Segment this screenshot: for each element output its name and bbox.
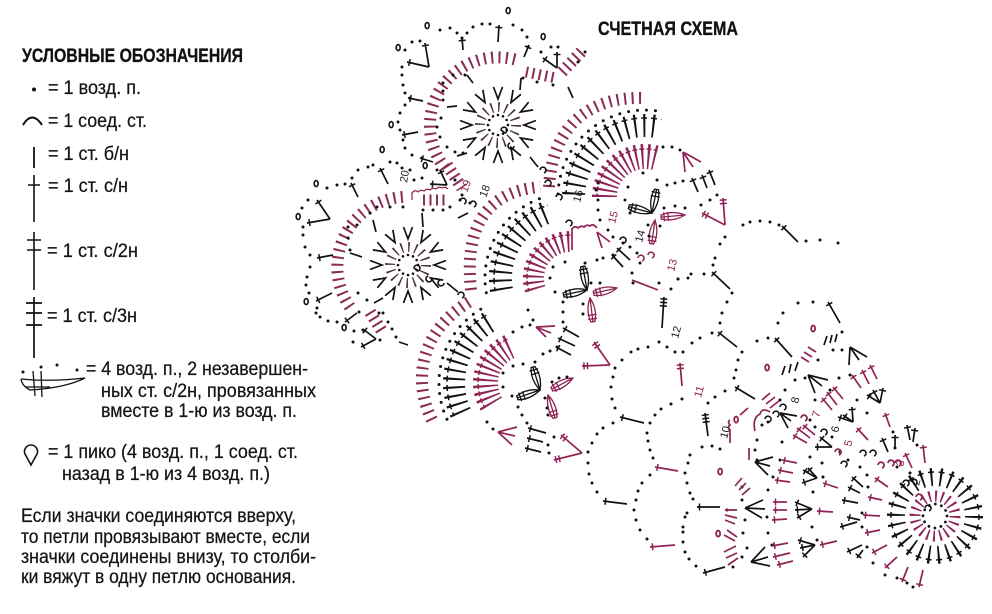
row numbers: 14 (633, 229, 648, 244)
row numbers (398, 169, 923, 487)
row numbers: 11 (692, 385, 707, 399)
row numbers: 3 (894, 459, 907, 468)
legend: double treble crochet: = 1 ст. с/3н (47, 306, 137, 327)
legend heading: УСЛОВНЫЕ ОБОЗНАЧЕНИЯ (22, 45, 243, 67)
lower fan (422, 300, 582, 460)
row numbers: 10 (718, 425, 733, 440)
scallop chains (588, 221, 917, 587)
legend: picot: = 1 пико (4 возд. п., 1 соед. ст. (48, 442, 298, 463)
row numbers: 12 (669, 325, 684, 340)
legend: single crochet: = 1 ст. б/н (48, 144, 129, 165)
legend: double crochet (28, 175, 128, 222)
top flower motif (389, 8, 585, 188)
row numbers: 5 (842, 439, 855, 448)
corner medallion and outer rows (716, 326, 979, 587)
row numbers: 15 (606, 210, 621, 225)
row numbers: 8 (789, 396, 802, 405)
upper fan (549, 98, 725, 290)
legend: picot (25, 442, 298, 485)
legend: explanatory note: ки вяжут в одну петлю основания. (21, 567, 296, 588)
row numbers: 13 (665, 258, 680, 273)
row numbers: 19 (459, 178, 474, 194)
diagram heading: СЧЕТНАЯ СХЕМА (598, 18, 738, 40)
row numbers: 6 (829, 425, 842, 434)
row numbers: 20 (398, 169, 412, 184)
legend: slip stitch: = 1 соед. ст. (48, 111, 147, 132)
row numbers: 18 (478, 183, 493, 199)
chart: crochet diagram (296, 8, 979, 587)
legend: cluster symbol (21, 359, 316, 422)
row numbers: 7 (810, 410, 823, 419)
legend: double treble crochet (26, 297, 137, 358)
row numbers: 16 (571, 189, 586, 204)
legend: cluster symbol: ных ст. с/2н, провязанных (101, 381, 316, 402)
row numbers: 2 (910, 478, 923, 487)
legend: cluster symbol: вместе в 1-ю из возд. п. (101, 401, 297, 422)
legend: double crochet: = 1 ст. с/н (48, 176, 128, 197)
legend: explanatory note: то петли провязывают вместе, если (21, 527, 310, 548)
legend: explanatory note: значки соединены внизу, то столби- (21, 547, 316, 568)
legend: cluster symbol: = 4 возд. п., 2 незавершен- (86, 359, 308, 380)
left flower motif (296, 147, 476, 347)
legend: treble crochet: = 1 ст. с/2н (47, 241, 138, 262)
legend: treble crochet (27, 232, 138, 290)
legend: picot: назад в 1-ю из 4 возд. п.) (62, 464, 270, 485)
middle fan (458, 167, 688, 366)
legend: chain stitch: = 1 возд. п. (48, 78, 141, 99)
legend: explanatory note: Если значки соединяются вверху, (21, 506, 296, 527)
legend: explanatory note (21, 506, 316, 588)
